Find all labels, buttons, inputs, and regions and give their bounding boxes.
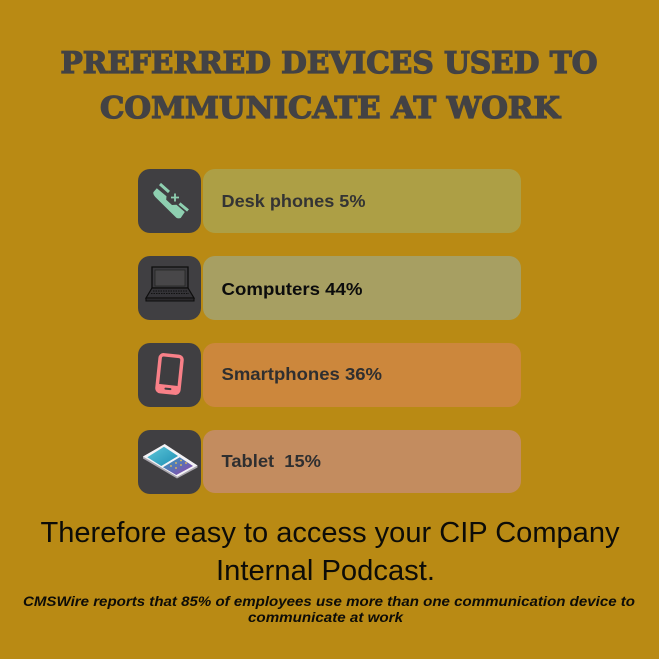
text block: source note: communicate at work bbox=[248, 609, 404, 625]
text block: conclusion: Internal Podcast. bbox=[216, 555, 435, 587]
row: computers bbox=[138, 256, 521, 320]
bar: desk phones bbox=[203, 169, 521, 233]
text block: source note: CMSWire reports that 85% of employees use more than one communication device to bbox=[23, 593, 635, 609]
text block: source note bbox=[23, 593, 635, 625]
label: desk phones: Desk phones 5% bbox=[222, 191, 366, 211]
icon: desk phone bbox=[138, 169, 201, 233]
icon: tablet bbox=[138, 430, 201, 494]
bar: computers bbox=[203, 256, 521, 320]
bar: tablet bbox=[203, 430, 521, 493]
title: COMMUNICATE AT WORK bbox=[100, 91, 561, 126]
text block: conclusion bbox=[40, 517, 620, 587]
icon: laptop bbox=[138, 256, 201, 320]
text block: conclusion: Therefore easy to access your CIP Company bbox=[40, 517, 620, 549]
row: desk phones bbox=[138, 169, 521, 233]
title: PREFERRED DEVICES USED TO bbox=[60, 46, 598, 81]
icon: smartphone bbox=[138, 343, 201, 407]
label: computers: Computers 44% bbox=[222, 279, 363, 299]
label: tablet: Tablet 15% bbox=[222, 451, 321, 471]
label: smartphones: Smartphones 36% bbox=[222, 364, 382, 384]
title bbox=[60, 46, 598, 126]
row: smartphones bbox=[138, 343, 521, 407]
bar: smartphones bbox=[203, 343, 521, 407]
row: tablet bbox=[138, 430, 521, 494]
